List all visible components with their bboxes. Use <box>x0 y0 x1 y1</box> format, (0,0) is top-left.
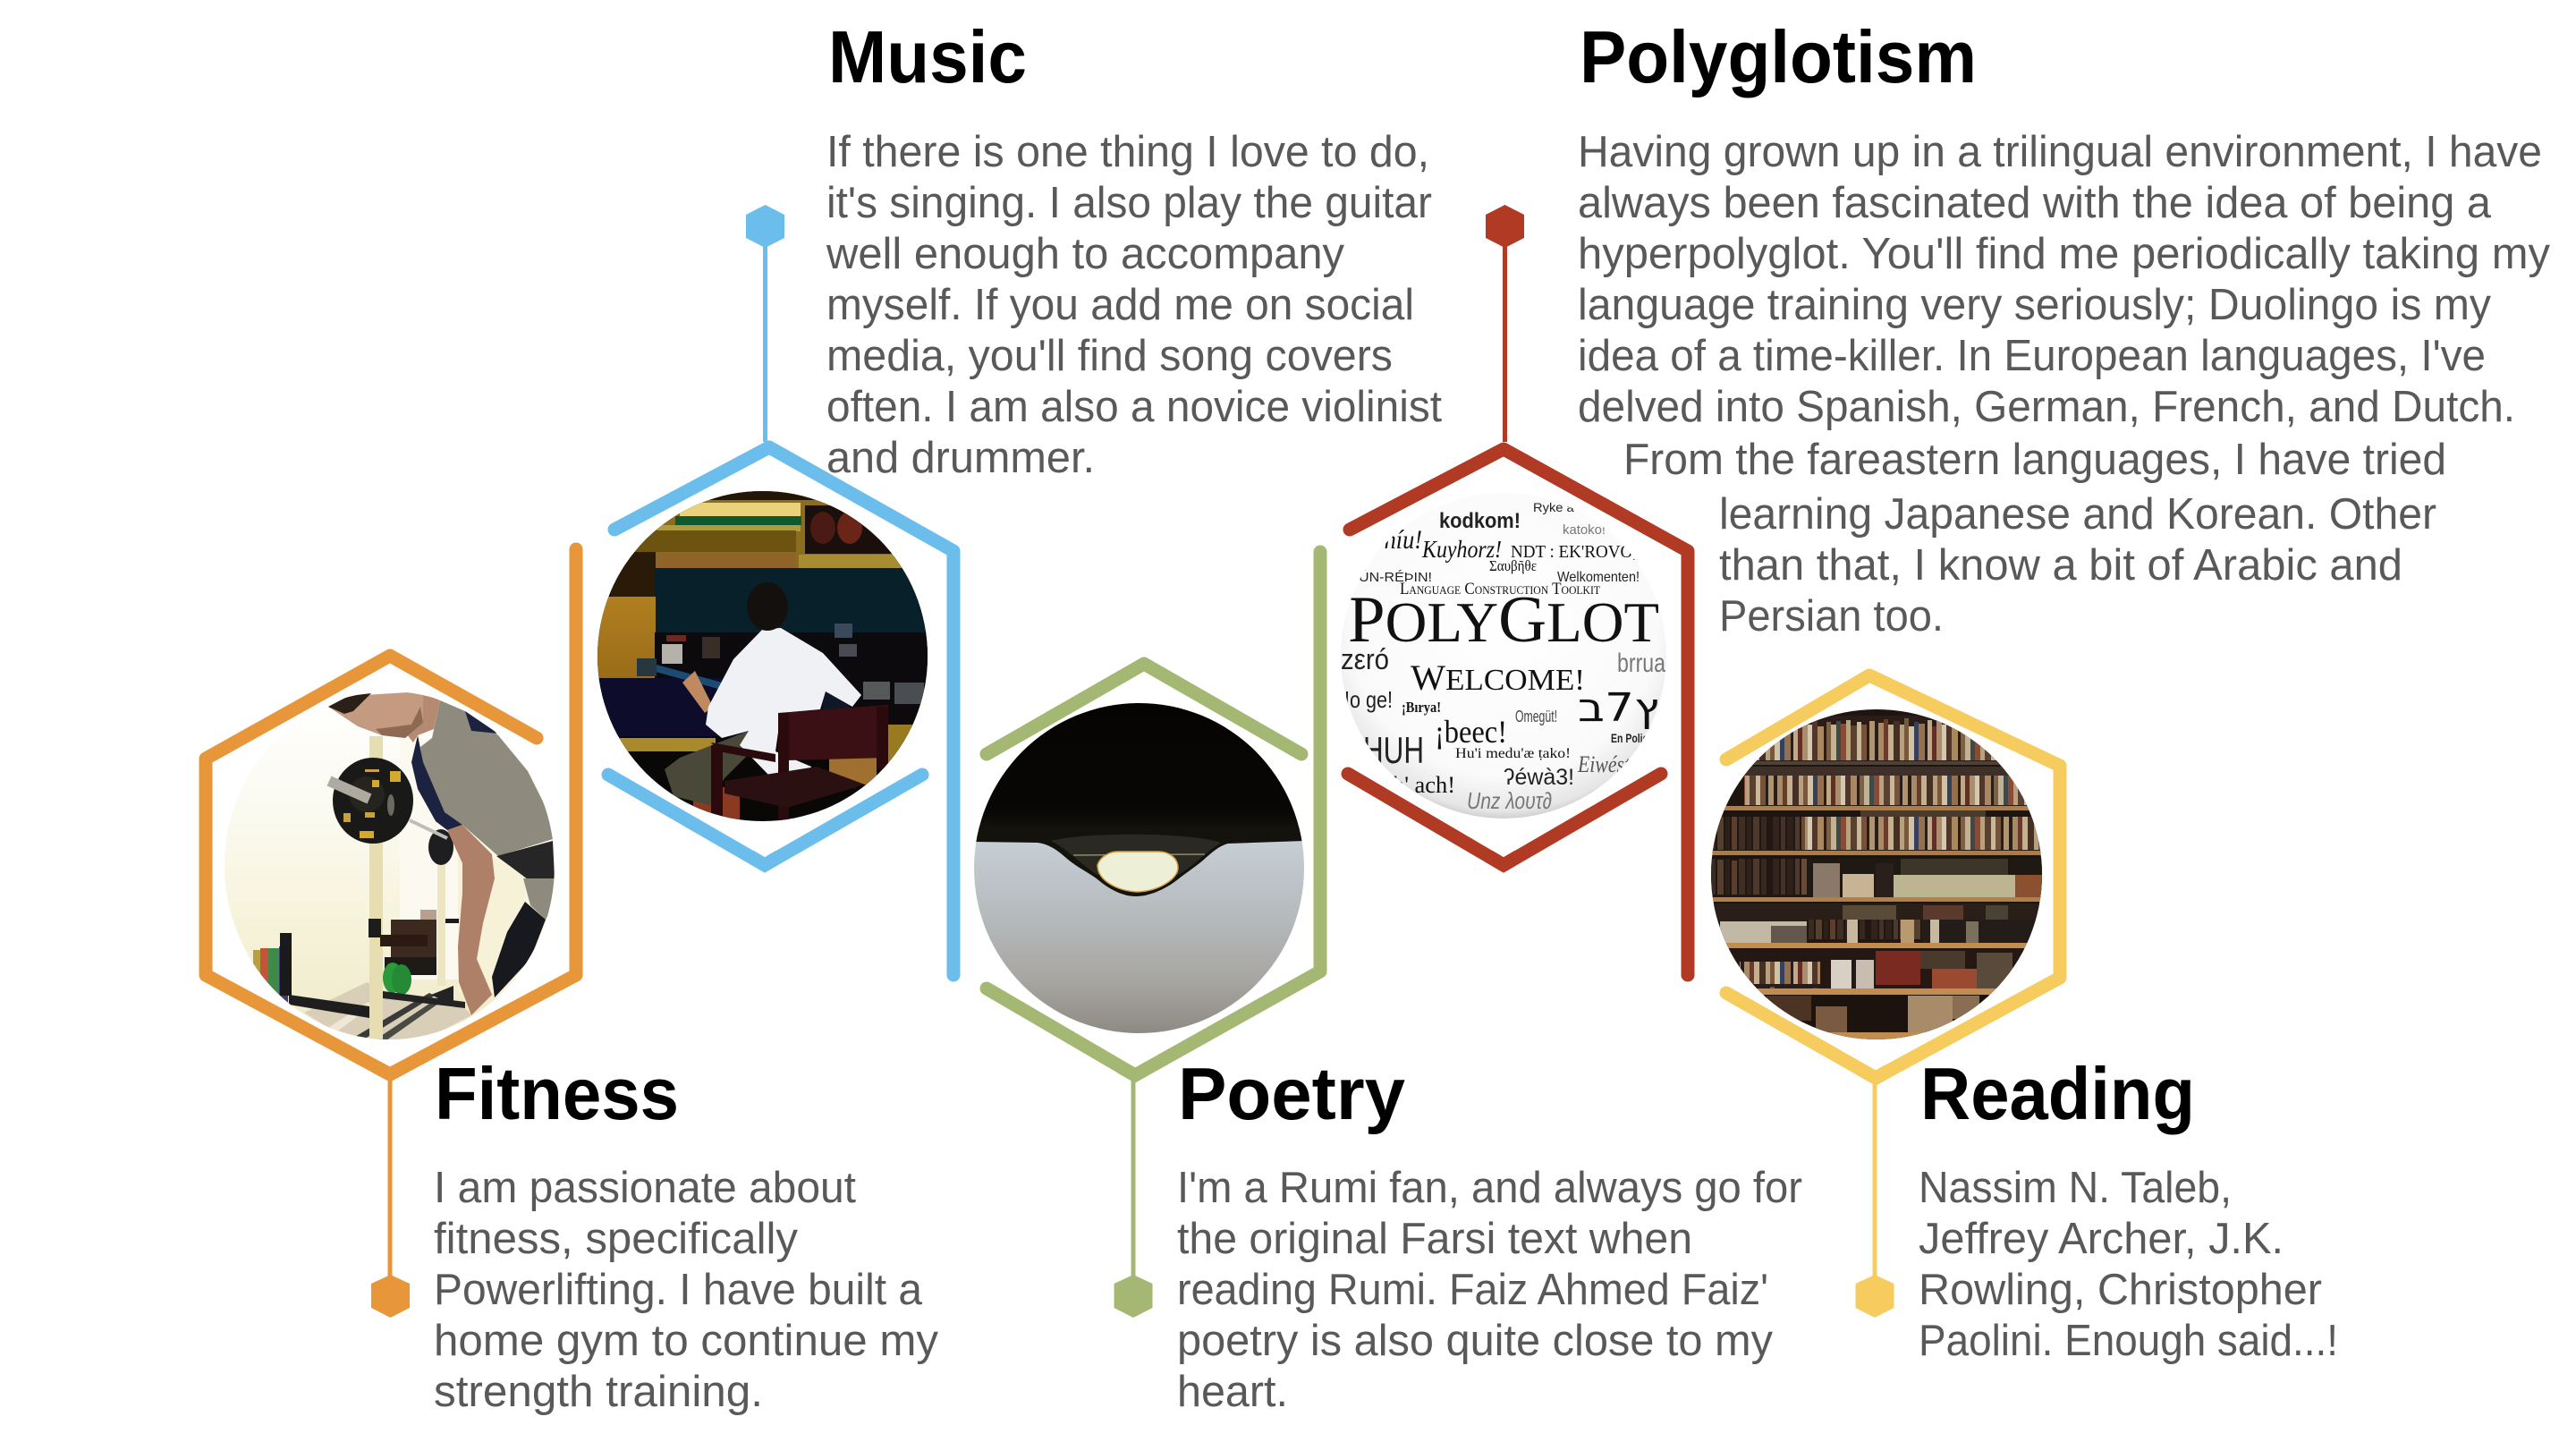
text: music description: If there is one thing I love to do, <box>826 128 1429 176</box>
photo: polyglot word sphere: h' ach! <box>1393 772 1455 798</box>
hexagon outline: poetry <box>987 552 1320 1075</box>
photo: water droplet <box>974 703 1305 1034</box>
panel: polyglotism <box>1341 15 2550 975</box>
photo: polyglot word sphere: Unz λουτ∂ <box>1467 787 1552 814</box>
photo: polyglot word sphere: Eiwést <box>1577 751 1631 777</box>
heading: Polyglotism: Polyglotism <box>1580 15 1977 98</box>
text: music description: well enough to accompany <box>826 230 1344 278</box>
text: music description: media, you'll find song covers <box>826 332 1393 380</box>
text: polyglotism description: learning Japanese and Korean. Other <box>1719 490 2436 539</box>
photo: man lifting barbell in home gym <box>225 691 555 1040</box>
photo: polyglot word sphere: ¡beec! <box>1435 714 1507 750</box>
photo: polyglot word sphere: ¡Bırya! <box>1402 699 1441 716</box>
text: fitness description <box>434 1164 938 1416</box>
photo: polyglot word sphere: chíu! <box>1374 525 1422 555</box>
text: reading description: Paolini. Enough said...! <box>1919 1317 2338 1365</box>
photo: polyglot word sphere: brrua <box>1617 649 1665 678</box>
text: fitness description: home gym to continue my <box>434 1317 938 1365</box>
text: music description: and drummer. <box>826 434 1095 482</box>
text: poetry description: I'm a Rumi fan, and always go for <box>1177 1164 1802 1212</box>
text: fitness description: I am passionate about <box>434 1164 856 1212</box>
hexagon outline: music <box>608 447 953 975</box>
connector pin: poetry <box>1114 1078 1152 1318</box>
heading: Reading: Reading <box>1920 1052 2195 1135</box>
text: music description <box>826 128 1442 482</box>
hexagon outline: reading <box>1726 675 2060 1078</box>
text: polyglotism description: hyperpolyglot. You'll find me periodically taking my <box>1578 230 2550 278</box>
photo: polyglot word sphere: Omegüt! <box>1515 708 1557 725</box>
text: poetry description <box>1177 1164 1802 1416</box>
photo: polyglot word sphere: ÚN-RÉÞIN! <box>1359 570 1432 585</box>
text: music description: myself. If you add me on social <box>826 281 1414 329</box>
photo: polyglot word sphere: katoko! <box>1563 522 1606 538</box>
photo: polyglot word sphere: POLYGLOT <box>1348 583 1659 657</box>
connector pin: fitness <box>371 1078 410 1318</box>
text: poetry description: heart. <box>1177 1368 1288 1416</box>
connector pin: polyglotism <box>1486 205 1524 442</box>
text: polyglotism description: than that, I know a bit of Arabic and <box>1719 541 2402 590</box>
photo: polyglot word sphere: WELCOME! <box>1411 657 1585 698</box>
photo: polyglot word sphere: Ryke a ta <box>1533 500 1589 514</box>
text: poetry description: reading Rumi. Faiz Ahmed Faiz' <box>1177 1266 1768 1314</box>
text: fitness description: Powerlifting. I have built a <box>434 1266 923 1314</box>
photo: polyglot word sphere: Language Construction Toolkit <box>1400 580 1600 598</box>
heading: Poetry: Poetry <box>1178 1052 1405 1135</box>
photo: guitarist on stage <box>597 491 928 822</box>
photo: polyglot word sphere: Kuyhorz! <box>1421 536 1502 563</box>
text: music description: often. I am also a novice violinist <box>826 383 1442 431</box>
heading: Fitness: Fitness <box>435 1052 679 1135</box>
text: polyglotism description: delved into Spanish, German, French, and Dutch. <box>1578 383 2515 431</box>
text: music description: it's singing. I also play the guitar <box>826 179 1432 227</box>
photo: polyglot word sphere: ץ7ב <box>1578 685 1659 731</box>
text: reading description: Nassim N. Taleb, <box>1919 1164 2232 1212</box>
connector pin: reading <box>1855 1081 1894 1318</box>
text: reading description: Rowling, Christopher <box>1919 1266 2322 1314</box>
panel: fitness <box>206 549 938 1416</box>
photo: polyglot word sphere: Hu'i medu'æ ṭako! <box>1455 746 1571 761</box>
text: polyglotism description: Persian too. <box>1719 592 1944 640</box>
text: fitness description: fitness, specifically <box>434 1215 798 1263</box>
text: polyglotism description: Having grown up in a trilingual environment, I have <box>1578 128 2542 176</box>
photo: polyglot word sphere: zεró <box>1341 643 1389 675</box>
photo: polyglot word sphere: En Polig <box>1611 731 1648 745</box>
text: polyglotism description: idea of a time-killer. In European languages, I've <box>1578 332 2486 380</box>
text: reading description <box>1919 1164 2338 1365</box>
photo: polyglot word sphere: Welkomenten! <box>1557 570 1640 585</box>
heading: Music: Music <box>828 15 1027 98</box>
photo: polyglot word sphere: NDT : EK'ROVO, <box>1511 542 1637 562</box>
text: polyglotism description: always been fascinated with the idea of being a <box>1578 179 2492 227</box>
hexagon outline: polyglotism <box>1348 449 1688 975</box>
panel: poetry <box>974 552 1802 1416</box>
panel: reading <box>1711 675 2338 1365</box>
photo: polyglot word sphere: Σαυβῆθε <box>1489 557 1537 574</box>
photo: polyglot word sphere <box>1341 493 1666 819</box>
hexagon outline: fitness <box>206 549 576 1074</box>
connector pin: music <box>746 205 784 442</box>
panel: music <box>597 15 1442 975</box>
photo: polyglot word sphere: HUH <box>1363 729 1424 771</box>
text: polyglotism description: language training very seriously; Duolingo is my <box>1578 281 2491 329</box>
text: polyglotism description: From the fareastern languages, I have tried <box>1623 436 2446 484</box>
photo: polyglot word sphere: !o ge! <box>1344 686 1393 713</box>
photo: bookshelf <box>1711 709 2075 1040</box>
photo: polyglot word sphere: ʔéwà3! <box>1504 765 1574 790</box>
text: fitness description: strength training. <box>434 1368 763 1416</box>
text: reading description: Jeffrey Archer, J.K. <box>1919 1215 2284 1263</box>
text: poetry description: poetry is also quite close to my <box>1177 1317 1773 1365</box>
text: poetry description: the original Farsi text when <box>1177 1215 1692 1263</box>
text: polyglotism description <box>1578 128 2550 640</box>
photo: polyglot word sphere: kodkom! <box>1439 509 1521 533</box>
